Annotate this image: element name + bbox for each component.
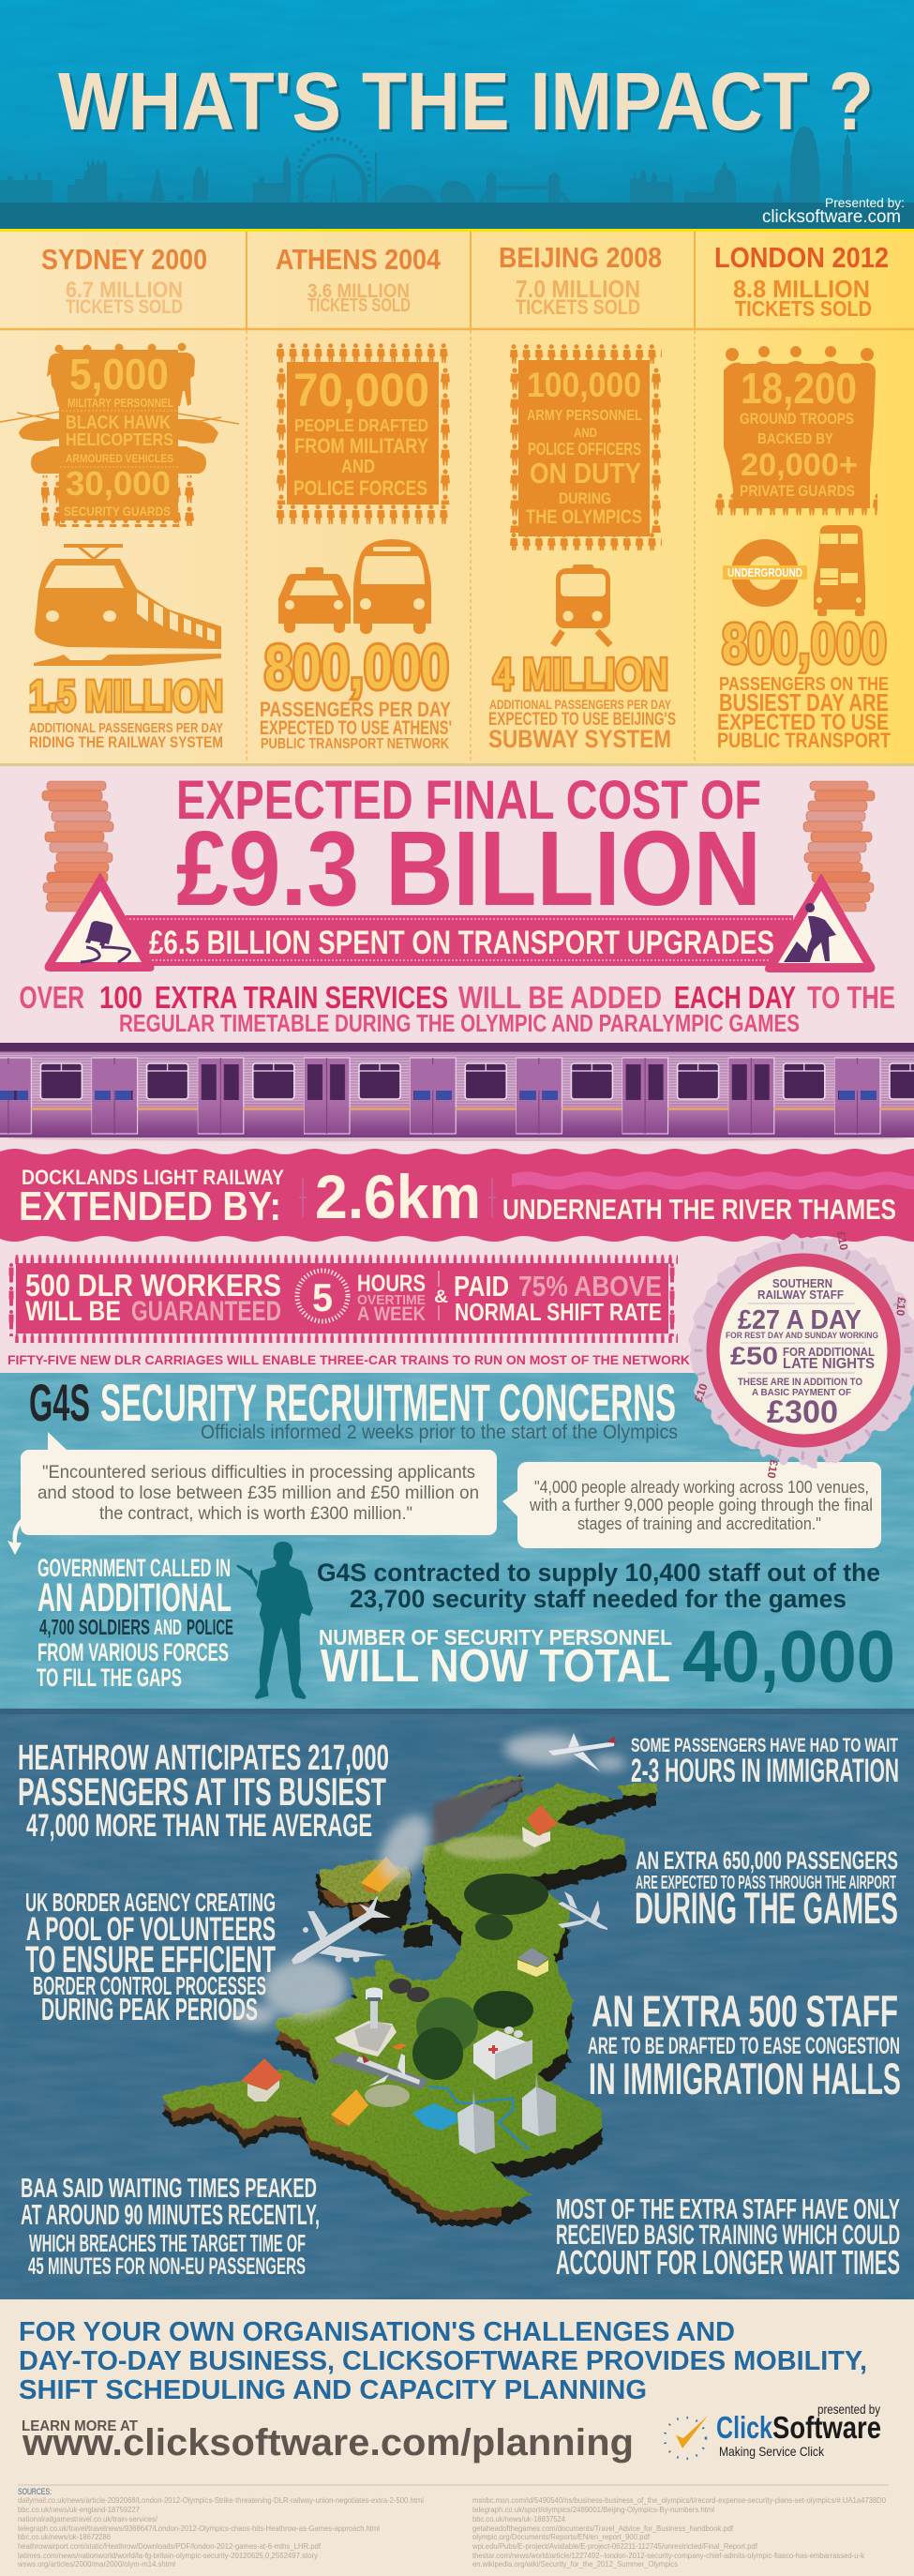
heading: London: 8.8 MILLION xyxy=(733,275,870,303)
text: Heathrow anticipates: PASSENGERS AT ITS BUSIEST xyxy=(18,1770,386,1814)
speech bubble: difficulties: "Encountered serious difficulties in processing applicants xyxy=(42,1462,475,1483)
icon: underground roundel xyxy=(723,548,807,598)
heading: 9.3 billion: £9.3 BILLION xyxy=(176,809,761,927)
text: border agency: A POOL OF VOLUNTEERS xyxy=(26,1911,276,1948)
sources: bbc.co.uk/news/uk-18837524 xyxy=(472,2514,565,2523)
sources: olympic.org/Documents/Reports/EN/en_report_900.pdf xyxy=(472,2532,651,2541)
text: extra train services: WILL BE ADDED xyxy=(458,980,662,1015)
panel: Southern Railway medallion: A BASIC PAYMENT OF xyxy=(752,1387,852,1398)
text: personnel total: NUMBER OF SECURITY PERSONNEL xyxy=(319,1625,672,1650)
call to action xyxy=(19,2317,867,2405)
stat: 4 million: 4 MILLION xyxy=(493,649,668,699)
text: border agency: UK BORDER AGENCY CREATING xyxy=(25,1888,276,1917)
logo: ClickSoftware: Click xyxy=(716,2410,772,2445)
panel: Southern Railway medallion: £300 xyxy=(767,1394,838,1430)
illustration: UK island map xyxy=(161,1775,656,2226)
map: hospital xyxy=(473,2026,532,2080)
text: G4S contract xyxy=(317,1559,880,1613)
sources: heathrowairport.com/static/Heathrow/Downloads/PDF/london-2012-games-at-6-mths_LHR.pdf xyxy=(18,2541,322,2551)
text: extra train services: 100 xyxy=(99,980,142,1015)
call to action: DAY-TO-DAY BUSINESS, CLICKSOFTWARE PROVIDES MOBILITY, xyxy=(19,2346,867,2376)
presented by url xyxy=(762,195,905,227)
stat: 800,000 Athens: 800,000 xyxy=(264,632,449,701)
security graphic: Athens: POLICE FORCES xyxy=(293,476,427,500)
heading: London xyxy=(714,241,889,321)
sources: dailymail.co.uk/news/article-2092068/London-2012-Olympics-Strike-threatening-DLR-railway-union-negotiates-extra-2-500.html xyxy=(18,2495,424,2505)
icon: taxi and bus xyxy=(278,539,431,634)
plane: right xyxy=(558,1891,607,1930)
map: rocks xyxy=(389,1979,429,2002)
learn more url: LEARN MORE AT xyxy=(22,2418,139,2434)
heading: G4S concerns xyxy=(29,1373,676,1432)
caption: Beijing transport: SUBWAY SYSTEM xyxy=(488,725,671,753)
speech bubble: 4,000 people: with a further 9,000 people going through the final xyxy=(529,1496,873,1514)
banner: Docklands Light Railway xyxy=(0,1149,914,1242)
text: paid above rate: PAID xyxy=(454,1270,509,1303)
text: government called: TO FILL THE GAPS xyxy=(37,1664,182,1692)
text: extra train services: EXTRA TRAIN SERVICES xyxy=(155,980,448,1015)
security graphic: Beijing: ARMY PERSONNEL xyxy=(527,408,642,424)
sources: en.wikipedia.org/wiki/Security_for_the_2012_Summer_Olympics xyxy=(472,2559,678,2568)
sources xyxy=(17,2487,886,2568)
text: Heathrow anticipates xyxy=(18,1739,389,1844)
sources: getaheadofthegames.com/documents/Travel_Advice_for_Business_handbook.pdf xyxy=(472,2523,734,2533)
call to action: SHIFT SCHEDULING AND CAPACITY PLANNING xyxy=(19,2375,647,2405)
sources: bbc.co.uk/news/uk-18672286 xyxy=(18,2532,111,2541)
caption: Athens transport: EXPECTED TO USE ATHENS' xyxy=(260,717,452,739)
presented by url: clicksoftware.com xyxy=(762,207,901,227)
heading: Athens xyxy=(276,243,442,316)
panel: Southern Railway medallion: FOR ADDITIONAL xyxy=(783,1346,875,1359)
text: hours overtime: A WEEK xyxy=(357,1303,426,1325)
caption: Beijing transport: EXPECTED TO USE BEIJING'S xyxy=(488,710,676,730)
caption: Sydney transport: RIDING THE RAILWAY SYSTEM xyxy=(29,733,223,751)
call to action: FOR YOUR OWN ORGANISATION'S CHALLENGES AND xyxy=(19,2317,735,2347)
text: government called xyxy=(37,1554,233,1692)
sources: wpi.edu/Pubs/E-project/Available/E-project-062211-112745/unrestricted/Final_Report.pdf xyxy=(472,2541,758,2551)
icon: clock 5 hours: 5 xyxy=(312,1275,333,1319)
text: 500 workers: 500 DLR WORKERS xyxy=(25,1268,281,1303)
text: extra staff xyxy=(588,1986,901,2103)
map: cliffs xyxy=(162,1775,656,2226)
banner: Docklands Light Railway: DOCKLANDS LIGHT RAILWAY xyxy=(22,1166,284,1189)
text: 500 workers: WILL BE xyxy=(25,1296,121,1327)
security graphic: Athens: AND xyxy=(341,457,375,477)
text: border agency: DURING PEAK PERIODS xyxy=(41,1992,258,2026)
text: extra train services xyxy=(19,980,895,1037)
sources: latimes.com/news/nationworld/world/la-fg-britain-olympic-security-20120625,0,2552497.story xyxy=(18,2551,319,2560)
speech bubble: difficulties: and stood to lose between £35 million and £50 million on xyxy=(37,1483,479,1503)
text: G4S contract: G4S contracted to supply 10,400 staff out of the xyxy=(317,1559,880,1587)
text: G4S contract: 23,700 security staff needed for the games xyxy=(350,1585,847,1613)
security graphic: Beijing: 100,000 xyxy=(527,366,641,404)
caption: Sydney transport xyxy=(29,720,223,751)
text: paid above rate: NORMAL SHIFT RATE xyxy=(455,1298,662,1326)
text: hours overtime: HOURS xyxy=(357,1271,426,1297)
column: London 2012 xyxy=(714,241,891,752)
text: government called: FROM VARIOUS FORCES xyxy=(37,1638,229,1666)
panel: cost xyxy=(0,766,914,1373)
speech bubble: difficulties xyxy=(21,1432,497,1535)
banner: Docklands Light Railway: EXTENDED BY: xyxy=(19,1183,281,1229)
subheading: officials informed: Officials informed 2 weeks prior to the start of the Olympics xyxy=(201,1422,678,1443)
security graphic: Beijing: POLICE OFFICERS xyxy=(528,440,641,459)
heading: G4S concerns: G4S xyxy=(29,1373,90,1432)
security graphic: London: GROUND TROOPS xyxy=(740,410,854,428)
icon: coin stack left xyxy=(42,781,113,911)
icon: slippery road sign xyxy=(46,874,154,971)
text: BAA waiting times: AT AROUND 90 MINUTES RECENTLY, xyxy=(21,2198,320,2231)
logo: ClickSoftware: presented by xyxy=(817,2402,880,2417)
text: government called: POLICE xyxy=(187,1615,233,1639)
icon: road works sign xyxy=(766,875,874,972)
icon: subway train xyxy=(553,565,610,645)
panel: Southern Railway medallion: £10 xyxy=(765,1458,781,1480)
text: extra passengers xyxy=(635,1846,898,1933)
security graphic: Beijing: AND xyxy=(574,425,597,440)
panel: Southern Railway medallion xyxy=(690,1230,914,1480)
map: houses and tents xyxy=(241,1805,558,2126)
text: government called: GOVERNMENT CALLED IN xyxy=(37,1554,231,1582)
map: skyscrapers xyxy=(457,2072,556,2154)
icon: train xyxy=(34,546,221,666)
text: government called: AND xyxy=(154,1615,182,1639)
panel: Southern Railway medallion: £27 A DAY xyxy=(738,1305,862,1335)
security graphic: Athens: FROM MILITARY xyxy=(294,434,428,458)
text: government called: AN ADDITIONAL xyxy=(37,1575,232,1620)
ampersand divider: & xyxy=(434,1288,448,1307)
speech bubble: difficulties: the contract, which is worth £300 million." xyxy=(99,1503,412,1524)
panel: Southern Railway medallion: £10 xyxy=(834,1230,850,1252)
learn more url: www.clicksoftware.com/planning xyxy=(22,2422,634,2463)
security graphic: Beijing: DURING xyxy=(559,490,611,507)
caption: Sydney transport: ADDITIONAL PASSENGERS PER DAY xyxy=(29,720,223,736)
text: border agency: BORDER CONTROL PROCESSES xyxy=(33,1971,266,2000)
security graphic: Sydney: BLACK HAWK xyxy=(66,413,171,433)
security graphic: Sydney: SECURITY GUARDS xyxy=(64,504,171,519)
heading: expected final cost: EXPECTED FINAL COST OF xyxy=(176,770,761,831)
logo: ClickSoftware xyxy=(665,2402,881,2459)
map: green land xyxy=(161,1775,656,2210)
text: basic training xyxy=(556,2192,900,2282)
heading: Sydney: SYDNEY 2000 xyxy=(41,243,207,276)
heading: Beijing xyxy=(499,241,662,319)
sources: telegraph.co.uk/sport/olympics/2489001/Beijing-Olympics-By-numbers.html xyxy=(472,2505,714,2514)
heading: London: TICKETS SOLD xyxy=(735,296,872,321)
map: airport xyxy=(328,1988,428,2107)
text: 500 workers xyxy=(25,1268,281,1327)
security graphic: Athens: 70,000 xyxy=(293,364,429,416)
text: personnel total: WILL NOW TOTAL xyxy=(321,1641,670,1692)
icon: clouds xyxy=(230,1733,626,2027)
text: hours overtime xyxy=(357,1271,426,1325)
caption: Beijing transport: ADDITIONAL PASSENGERS PER DAY xyxy=(489,697,672,712)
security graphic: Beijing: ON DUTY xyxy=(530,457,641,490)
panel: Southern Railway medallion: LATE NIGHTS xyxy=(783,1356,875,1372)
panel: Southern Railway medallion: RAILWAY STAFF xyxy=(757,1288,844,1302)
panel: footer xyxy=(0,2299,914,2576)
text: government called: 4,700 SOLDIERS xyxy=(39,1615,150,1639)
text: Heathrow anticipates: HEATHROW ANTICIPATES 217,000 xyxy=(18,1739,389,1778)
sources: telegraph.co.uk/travel/travelnews/9368647/London-2012-Olympics-chaos-hits-Heathrow-as-Games-approach.html xyxy=(18,2523,380,2533)
panel: Olympics comparison xyxy=(0,229,914,766)
text: BAA waiting times: WHICH BREACHES THE TARGET TIME OF xyxy=(29,2229,306,2257)
icon: coin stack right xyxy=(803,781,875,911)
column: Beijing 2008 xyxy=(488,241,676,753)
plane: big xyxy=(292,1896,391,1965)
security graphic: Beijing xyxy=(509,344,662,550)
caption: Athens transport: PUBLIC TRANSPORT NETWORK xyxy=(261,736,449,752)
security graphic: London xyxy=(714,346,877,518)
panel: Southern Railway medallion: SOUTHERN xyxy=(772,1277,832,1290)
panel: Southern Railway medallion: THESE ARE IN ADDITION TO xyxy=(738,1377,862,1388)
caption: Beijing transport xyxy=(488,697,676,753)
security graphic: Sydney: ARMOURED VEHICLES xyxy=(66,452,173,465)
caption: new DLR carriages: FIFTY-FIVE NEW DLR CARRIAGES WILL ENABLE THREE-CAR TRAINS TO RUN ON MOST OF THE NETWORK xyxy=(7,1353,690,1367)
text: border agency xyxy=(25,1888,276,2026)
map: lake and river xyxy=(412,2086,530,2150)
heading: London: LONDON 2012 xyxy=(714,241,889,274)
security graphic: Beijing: THE OLYMPICS xyxy=(526,506,642,528)
panel: Heathrow sea xyxy=(0,1709,914,2299)
panel: DLR workers xyxy=(7,1255,678,1343)
caption: London transport xyxy=(717,674,891,752)
arrow: curved down xyxy=(7,1516,23,1555)
sources: thestar.com/news/world/article/1227492--london-2012-security-company-chief-admits-olympic-fiasco-has-embarrassed-u-k xyxy=(472,2551,865,2560)
security graphic: Sydney: 5,000 xyxy=(69,350,169,399)
text: personnel total xyxy=(319,1615,895,1697)
panel: Southern Railway medallion: £50 xyxy=(730,1342,778,1370)
security graphic: Sydney: HELICOPTERS xyxy=(66,429,173,449)
text: BAA waiting times: BAA SAID WAITING TIMES PEAKED xyxy=(21,2174,317,2204)
heading: Athens: 3.6 MILLION xyxy=(307,280,410,302)
panel: Southern Railway medallion: FOR REST DAY AND SUNDAY WORKING xyxy=(726,1331,878,1340)
text: immigration wait xyxy=(631,1735,899,1789)
text: extra train services: OVER xyxy=(19,980,84,1015)
speech bubble: 4,000 people: stages of training and accreditation." xyxy=(577,1514,821,1533)
security graphic: Athens xyxy=(276,343,452,524)
sources: wsws.org/articles/2000/mar2000/olym-m14.shtml xyxy=(17,2559,175,2568)
heading: Athens: ATHENS 2004 xyxy=(276,243,442,276)
text: paid above rate xyxy=(454,1270,662,1326)
heading: Beijing: BEIJING 2008 xyxy=(499,241,662,274)
presented by url: Presented by: xyxy=(825,195,905,210)
column: Athens 2004 xyxy=(260,243,452,752)
illustration: train carriages xyxy=(0,1043,914,1141)
security graphic: Sydney: MILITARY PERSONNEL xyxy=(67,396,173,410)
text: BAA waiting times xyxy=(21,2174,320,2280)
plane: top xyxy=(548,1733,616,1771)
icon: clock 5 hours xyxy=(297,1271,348,1321)
stat: 1.5 million: 1.5 MILLION xyxy=(29,671,223,720)
icon: soldier xyxy=(236,1542,313,1699)
security graphic: London: BACKED BY xyxy=(757,431,833,447)
security graphic: Sydney xyxy=(0,343,239,527)
column: Sydney 2000 xyxy=(0,243,239,751)
illustration: London skyline xyxy=(0,127,852,210)
text: 500 workers: GUARANTEED xyxy=(131,1296,281,1327)
security graphic: Sydney: 30,000 xyxy=(66,464,171,503)
text: extra train services: EACH DAY xyxy=(674,980,796,1015)
text: Heathrow anticipates: 47,000 MORE THAN THE AVERAGE xyxy=(26,1808,372,1844)
icon: aeroplanes xyxy=(292,1733,616,1965)
security graphic: London: PRIVATE GUARDS xyxy=(740,482,855,500)
banner: Docklands Light Railway: 2.6km xyxy=(315,1162,481,1231)
heading: Sydney: 6.7 MILLION xyxy=(66,278,183,303)
panel: Southern Railway medallion: £10 xyxy=(893,1297,908,1317)
icon: double decker bus xyxy=(814,525,865,616)
text: personnel total: 40,000 xyxy=(682,1615,895,1697)
banner: transport upgrades xyxy=(126,915,793,966)
text: hours overtime: OVERTIME xyxy=(357,1292,426,1308)
panel: header sky xyxy=(0,0,914,229)
speech bubble: 4,000 people: "4,000 people already working across 100 venues, xyxy=(534,1478,869,1497)
map: highland mist xyxy=(431,1777,541,1860)
heading: Athens: TICKETS SOLD xyxy=(307,295,411,316)
security graphic: London: 18,200 xyxy=(741,364,857,413)
speech bubble: 4,000 people xyxy=(502,1462,881,1548)
map: forests xyxy=(412,1874,548,2080)
text: BAA waiting times: 45 MINUTES FOR NON-EU PASSENGERS xyxy=(28,2253,306,2280)
caption: Athens transport: PASSENGERS PER DAY xyxy=(260,698,451,721)
sources: nationalrailgamestravel.co.uk/train-services/ xyxy=(18,2514,158,2523)
logo: ClickSoftware: Making Service Click xyxy=(719,2444,825,2459)
panel: Southern Railway medallion: £10 xyxy=(692,1381,711,1404)
security graphic: Athens: PEOPLE DRAFTED xyxy=(294,416,428,435)
caption: Athens transport xyxy=(260,698,452,752)
heading: Beijing: TICKETS SOLD xyxy=(516,295,640,319)
logo: ClickSoftware: Software xyxy=(772,2410,881,2445)
sources: bbc.co.uk/news/uk-england-18759227 xyxy=(18,2505,140,2514)
text: border agency: TO ENSURE EFFICIENT xyxy=(25,1939,276,1981)
panel: G4S sea xyxy=(0,1373,914,1709)
ampersand divider xyxy=(434,1271,448,1320)
sources: SOURCES: xyxy=(18,2487,52,2496)
heading: Beijing: 7.0 MILLION xyxy=(516,275,640,303)
text: paid above rate: 75% ABOVE xyxy=(518,1270,662,1303)
icon: underground roundel: UNDERGROUND xyxy=(727,565,802,580)
security graphic: London: 20,000+ xyxy=(741,447,858,483)
heading: Sydney: TICKETS SOLD xyxy=(66,296,183,318)
heading: Sydney xyxy=(41,243,207,318)
